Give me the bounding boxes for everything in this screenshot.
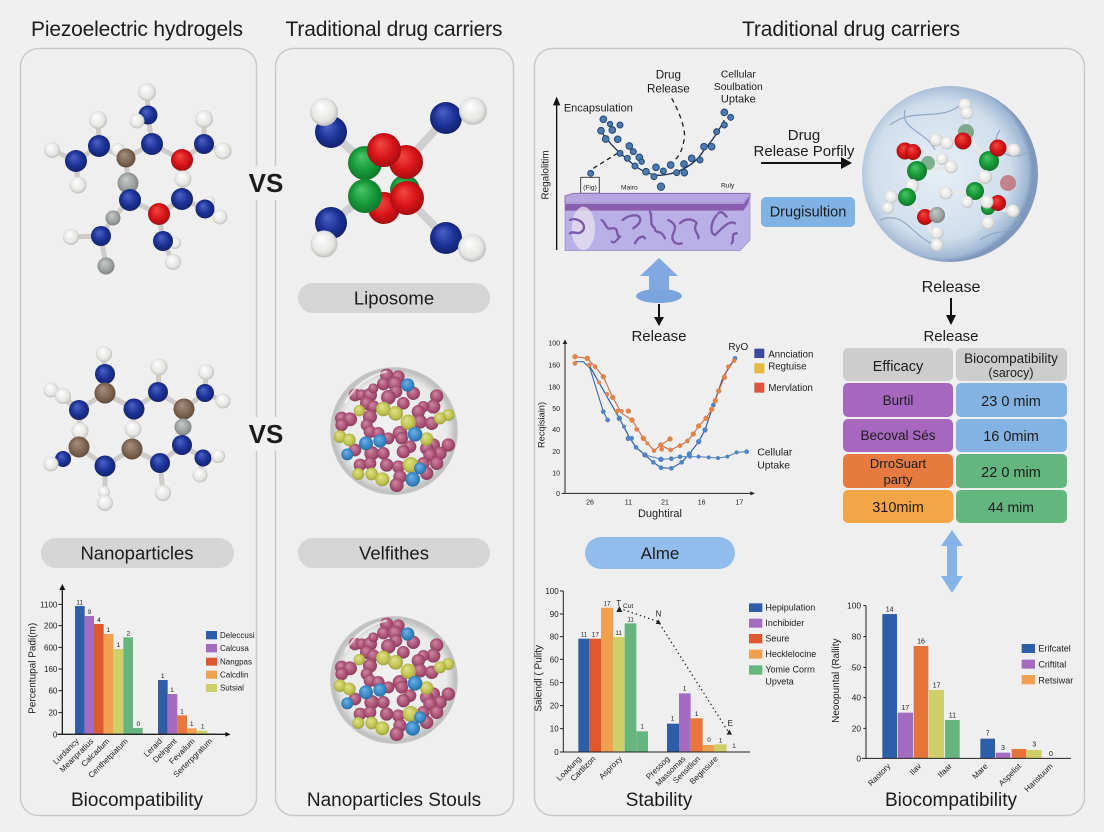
pill: alme: Alme bbox=[641, 544, 679, 563]
text: VS upper: VS bbox=[249, 168, 283, 198]
bar chart: biocompatibility right: 16 bbox=[917, 638, 925, 645]
line chart: release over time bbox=[536, 339, 813, 520]
bar chart: stability: Loadung bbox=[555, 754, 583, 783]
bar chart: stability: T bbox=[616, 599, 621, 608]
bar chart: stability: 1 bbox=[641, 724, 645, 731]
caption: biocompatibility right: Biocompatibility bbox=[885, 790, 1017, 811]
molecule: hydrogel structure two bbox=[44, 346, 230, 511]
bar chart: stability: 11 bbox=[581, 632, 588, 639]
bar chart: percentual purity: 600 bbox=[44, 643, 58, 652]
panel: drug release analysis bbox=[534, 48, 1084, 816]
nanoparticle cluster upper bbox=[331, 368, 457, 494]
line chart: release over time: Regtuise bbox=[768, 362, 806, 373]
bar chart: percentual purity: 1 bbox=[201, 724, 205, 731]
label pill: velfithes: Velfithes bbox=[359, 542, 429, 564]
bar chart: percentual purity bbox=[27, 584, 255, 780]
bar chart: percentual purity: 11 bbox=[76, 599, 83, 606]
bar chart: percentual purity: 0 bbox=[136, 721, 140, 728]
diagram: hydrogel drug release curve: Cellular bbox=[721, 69, 756, 80]
line chart: release over time: RyO bbox=[728, 342, 749, 353]
nanoparticle cluster lower bbox=[331, 617, 457, 743]
bar chart: percentual purity: 1 bbox=[116, 642, 120, 649]
bar chart: biocompatibility right: Hanstuum bbox=[1023, 761, 1055, 794]
bar chart: stability: 1 bbox=[732, 743, 736, 750]
bar chart: biocompatibility right: Raotory bbox=[866, 762, 892, 788]
table row four bbox=[843, 490, 1067, 523]
bar chart: percentual purity: 1 bbox=[170, 687, 174, 694]
line chart: release over time: 160 bbox=[548, 362, 560, 369]
label pill: liposome bbox=[298, 283, 490, 313]
table row three: DrroSuart bbox=[870, 456, 927, 471]
bar chart: stability: Inchibider bbox=[765, 618, 804, 628]
line chart: release over time: 21 bbox=[661, 499, 669, 506]
bar chart: percentual purity: Meanpratius bbox=[58, 737, 95, 774]
title: piezoelectric hydrogels: Piezoelectric hydrogels bbox=[31, 18, 243, 41]
bar chart: percentual purity: Nangpas bbox=[220, 658, 252, 667]
bar chart: percentual purity: 1 bbox=[161, 673, 165, 680]
bar chart: stability: 1 bbox=[683, 686, 687, 693]
arrow: to capsule bbox=[761, 157, 852, 169]
line chart: release over time: 16 bbox=[698, 499, 706, 506]
panel: piezoelectric hydrogels bbox=[20, 48, 256, 816]
bar chart: stability: Seure bbox=[765, 633, 789, 643]
bar chart: biocompatibility right: 3 bbox=[1032, 742, 1036, 749]
bar chart: stability: Beginsure bbox=[688, 754, 720, 786]
table header: (sarocy) bbox=[988, 366, 1034, 380]
line chart: release over time: Mervlation bbox=[768, 383, 813, 394]
bar chart: percentual purity: 1100 bbox=[40, 600, 58, 609]
label pill: nanoparticles: Nanoparticles bbox=[80, 542, 194, 564]
bar chart: stability: 0 bbox=[707, 737, 711, 744]
bar chart: stability: 1 bbox=[671, 716, 675, 723]
caption: nanoparticles stouls: Nanoparticles Stouls bbox=[307, 790, 481, 811]
caption: stability: Stability bbox=[626, 790, 693, 811]
bar chart: stability: 90 bbox=[550, 610, 559, 619]
bar chart: stability: 0 bbox=[554, 748, 559, 757]
bar chart: stability: 100 bbox=[545, 587, 559, 596]
table row three bbox=[843, 454, 1067, 488]
bar chart: biocompatibility right: 0 bbox=[856, 753, 861, 763]
bar chart: stability: 1 bbox=[695, 711, 699, 718]
line chart: release over time: Cellular bbox=[757, 447, 793, 458]
caption: biocompatibility left: Biocompatibility bbox=[71, 790, 203, 811]
title: traditional drug carriers, middle: Traditional drug carriers bbox=[286, 18, 502, 41]
table row three: 22 0 mim bbox=[981, 465, 1041, 481]
bar chart: percentual purity: Delrgent bbox=[151, 736, 179, 764]
table row one bbox=[843, 383, 1067, 417]
bar chart: biocompatibility right: 40 bbox=[852, 693, 861, 703]
bar chart: biocompatibility right: 11 bbox=[949, 712, 956, 719]
table row four: 44 mim bbox=[988, 499, 1034, 515]
line chart: release over time: 180 bbox=[548, 384, 560, 391]
bar chart: percentual purity: 2 bbox=[126, 630, 130, 637]
arrow: up arrow with disc bbox=[636, 258, 682, 303]
diagram: hydrogel drug release curve bbox=[541, 68, 763, 251]
arrow: release right down bbox=[946, 298, 956, 325]
bar chart: biocompatibility right: Ifaar bbox=[936, 761, 954, 779]
bar chart: stability: 11 bbox=[627, 616, 634, 623]
bar chart: percentual purity: 0 bbox=[53, 730, 58, 739]
title: traditional drug carriers, right: Traditional drug carriers bbox=[742, 18, 960, 41]
molecule: hydrogel structure one bbox=[44, 83, 232, 274]
bar chart: percentual purity: Centhetpiatum bbox=[87, 736, 130, 780]
bar chart: percentual purity: 160 bbox=[44, 665, 58, 674]
line chart: release over time: 11 bbox=[625, 499, 632, 506]
bar chart: stability: Yomie Corrn bbox=[765, 665, 815, 675]
table: efficacy and biocompatibility bbox=[843, 348, 1067, 523]
table row two bbox=[843, 419, 1067, 452]
pill: alme bbox=[585, 537, 735, 569]
diagram: hydrogel drug release curve: Soulbation bbox=[714, 82, 763, 93]
bar chart: stability: Hepipulation bbox=[765, 603, 815, 613]
bar chart: stability: 11 bbox=[615, 630, 622, 637]
bar chart: percentual purity: Serterpgratum bbox=[172, 736, 214, 779]
bar chart: stability: N bbox=[655, 610, 661, 619]
bar chart: percentual purity: Deleccusi bbox=[220, 631, 255, 640]
table row four: 310mim bbox=[872, 500, 924, 516]
bar chart: percentual purity: Fevailum bbox=[167, 736, 197, 766]
bar chart: percentual purity: 1 bbox=[106, 627, 110, 634]
bar chart: biocompatibility right: Criftital bbox=[1038, 659, 1066, 669]
line chart: release over time: 26 bbox=[586, 499, 594, 506]
bar chart: biocompatibility right: Aspelist bbox=[997, 761, 1024, 788]
bar chart: percentual purity: 60 bbox=[48, 687, 58, 696]
text: VS lower: VS bbox=[249, 419, 283, 449]
diagram: hydrogel drug release curve: (Fig) bbox=[583, 184, 597, 191]
bar chart: stability: Asproxy bbox=[597, 754, 624, 781]
label: drug release profile: Drug bbox=[788, 127, 820, 144]
arrow: double vertical bbox=[941, 530, 963, 593]
line chart: release over time: 20 bbox=[552, 449, 560, 456]
text: release middle: Release bbox=[631, 328, 687, 345]
bar chart: biocompatibility right: 7 bbox=[986, 730, 990, 737]
bar chart: biocompatibility right: 20 bbox=[852, 723, 861, 733]
bar chart: stability: Sensitlion bbox=[671, 754, 702, 785]
bar chart: stability: 20 bbox=[550, 702, 559, 711]
table header: Biocompatibility bbox=[964, 351, 1058, 366]
table row two: Becoval Sés bbox=[860, 428, 936, 443]
diagram: hydrogel drug release curve: Regalolitim bbox=[541, 150, 552, 200]
bar chart: stability: 1 bbox=[719, 738, 723, 745]
bar chart: stability: 60 bbox=[550, 655, 559, 664]
bar chart: stability: Cut bbox=[623, 603, 633, 610]
bar chart: stability: 17 bbox=[603, 601, 611, 608]
bar chart: percentual purity: Calcusa bbox=[220, 644, 249, 653]
bar chart: stability: Salendl ( Pulity bbox=[534, 645, 545, 712]
panel: traditional drug carriers bbox=[276, 48, 514, 816]
bar chart: biocompatibility right: 100 bbox=[847, 601, 861, 611]
bar chart: percentual purity: Percentupal Padi(m) bbox=[27, 623, 38, 714]
bar chart: percentual purity: 9 bbox=[87, 609, 91, 616]
table row two: 16 0mim bbox=[983, 429, 1039, 445]
label pill: liposome: Liposome bbox=[354, 288, 434, 308]
bar chart: percentual purity: 4 bbox=[97, 617, 101, 624]
text: release right lower: Release bbox=[923, 328, 979, 345]
bar chart: stability bbox=[534, 587, 816, 788]
table row three: party bbox=[884, 472, 913, 487]
line chart: release over time: 100 bbox=[548, 340, 560, 347]
bar chart: biocompatibility right: 14 bbox=[886, 606, 894, 613]
diagram: hydrogel drug release curve: Ruly bbox=[721, 182, 735, 189]
bar chart: biocompatibility right: 50 bbox=[852, 662, 861, 672]
line chart: release over time: 10 bbox=[552, 470, 560, 477]
bar chart: biocompatibility right: Retsiwar bbox=[1038, 675, 1073, 685]
bar chart: percentual purity: 200 bbox=[44, 622, 58, 631]
line chart: release over time: 50 bbox=[552, 406, 560, 413]
table header bbox=[843, 348, 1067, 381]
table row one: Burtil bbox=[883, 393, 913, 408]
label pill: velfithes bbox=[298, 538, 490, 568]
bar chart: stability: 10 bbox=[550, 725, 559, 734]
bar chart: stability: 17 bbox=[592, 632, 599, 639]
text: release right upper: Release bbox=[922, 279, 980, 296]
bar chart: percentual purity: Leraid bbox=[142, 737, 164, 759]
bar chart: stability: E bbox=[728, 719, 733, 728]
bar chart: biocompatibility right: Mare bbox=[971, 761, 990, 781]
label pill: nanoparticles bbox=[41, 538, 234, 568]
line chart: release over time: Dughtiral bbox=[638, 508, 682, 520]
bar chart: percentual purity: Sutsial bbox=[220, 684, 244, 693]
bar chart: percentual purity: Calcdlin bbox=[220, 670, 248, 679]
diagram: hydrogel drug release curve: Encapsulation bbox=[564, 103, 633, 115]
line chart: release over time: 0 bbox=[556, 491, 560, 498]
arrow: release down bbox=[654, 304, 664, 326]
line chart: release over time: 17 bbox=[735, 499, 743, 506]
molecule: liposome core bbox=[310, 97, 487, 262]
bar chart: percentual purity: 1 bbox=[190, 721, 194, 728]
diagram: hydrogel drug release curve: Release bbox=[647, 82, 690, 95]
label: drug release profile: Release Porfily bbox=[754, 143, 855, 160]
line chart: release over time: Annciation bbox=[768, 349, 813, 360]
table row one: 23 0 mim bbox=[981, 394, 1041, 410]
bar chart: biocompatibility right: 17 bbox=[901, 705, 909, 712]
line chart: release over time: 40 bbox=[552, 427, 560, 434]
bar chart: stability: Upveta bbox=[765, 677, 794, 687]
button: drugisultion bbox=[761, 197, 855, 227]
bar chart: biocompatibility right: 0 bbox=[1049, 751, 1053, 758]
diagram: hydrogel drug release curve: Uptake bbox=[721, 93, 756, 105]
bar chart: biocompatibility right: Ilav bbox=[908, 762, 923, 777]
bar chart: stability: 80 bbox=[550, 633, 559, 642]
bar chart: biocompatibility right: Erifcatel bbox=[1038, 643, 1071, 653]
capsule: drug loaded sphere bbox=[862, 86, 1038, 262]
line chart: release over time: Uptake bbox=[757, 460, 790, 471]
label: drug release profile bbox=[754, 127, 855, 160]
bar chart: stability: Cartlizon bbox=[569, 754, 597, 783]
bar chart: biocompatibility right: Neoopuntal (Rallity bbox=[831, 638, 842, 723]
table header: Efficacy bbox=[873, 359, 924, 375]
bar chart: stability: 50 bbox=[550, 679, 559, 688]
diagram: hydrogel drug release curve: Mairo bbox=[621, 184, 638, 191]
bar chart: biocompatibility right bbox=[831, 601, 1073, 794]
line chart: release over time: Recqisiain) bbox=[536, 402, 546, 448]
bar chart: percentual purity: 1 bbox=[180, 708, 184, 715]
bar chart: percentual purity: Lurdancy bbox=[51, 737, 81, 766]
bar chart: stability: Massomas bbox=[654, 754, 687, 788]
bar chart: biocompatibility right: 3 bbox=[1001, 745, 1005, 752]
bar chart: biocompatibility right: 17 bbox=[933, 682, 941, 689]
bar chart: biocompatibility right: 80 bbox=[852, 632, 861, 642]
bar chart: percentual purity: 20 bbox=[48, 709, 58, 718]
bar chart: percentual purity: Calcadum bbox=[80, 736, 112, 769]
bar chart: stability: Hecklelocine bbox=[765, 649, 816, 659]
button: drugisultion: Drugisultion bbox=[770, 204, 846, 220]
bar chart: stability: Pressog bbox=[644, 754, 671, 781]
diagram: hydrogel drug release curve: Drug bbox=[656, 68, 681, 81]
